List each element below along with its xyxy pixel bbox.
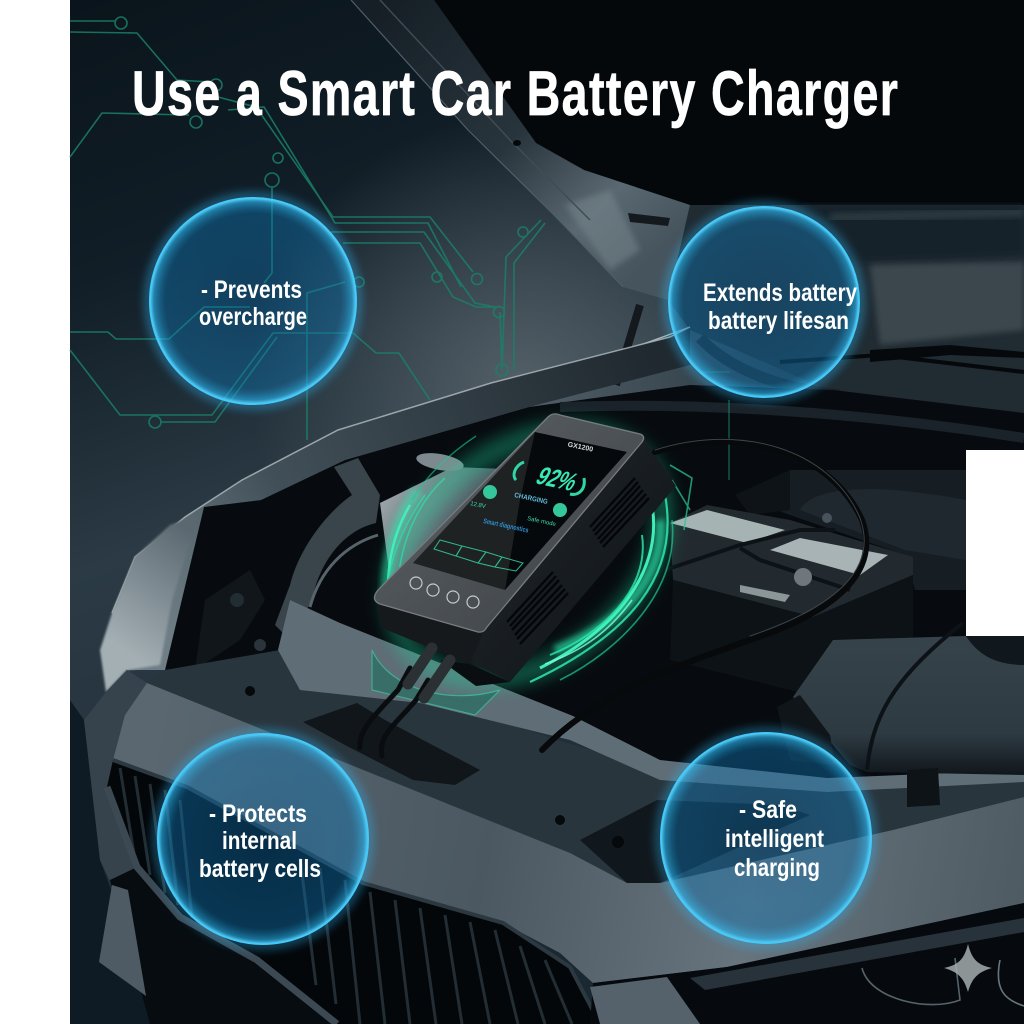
bubble: protects internal battery cells xyxy=(157,733,369,945)
lower bumper piece xyxy=(590,977,700,1024)
charger side body with vents xyxy=(376,437,676,686)
bubble text: charging xyxy=(734,854,820,882)
smart charger device xyxy=(374,414,676,686)
white blank block xyxy=(966,450,1024,636)
bubble text: intelligent xyxy=(725,825,825,853)
engine hoses xyxy=(735,470,966,590)
display: model label: GX1200 xyxy=(567,441,594,454)
energy swirl around charger xyxy=(345,372,730,730)
engine cover behind the charger xyxy=(380,467,530,625)
display: waveform: Smart diagnostics xyxy=(483,518,529,535)
open hood underside xyxy=(351,0,690,300)
bubble: prevents overcharge xyxy=(149,197,357,405)
coolant reservoir xyxy=(777,623,1024,807)
left output plug xyxy=(360,668,410,748)
cowl rubber seal xyxy=(560,406,1024,438)
bubble text: Extends battery xyxy=(703,279,857,307)
display: readings: 12.8V xyxy=(470,501,486,510)
inner fender well xyxy=(195,458,380,670)
radiator support panel xyxy=(147,650,1024,883)
engine bay xyxy=(165,385,1024,800)
bubble text: overcharge xyxy=(199,303,307,331)
cable to battery and front xyxy=(542,441,866,750)
bubble text xyxy=(725,796,825,882)
icon: sparkle watermark xyxy=(944,944,992,992)
dark lower-left front xyxy=(70,700,337,1024)
headlamp bump highlight xyxy=(100,515,198,692)
title: Use a Smart Car Battery Charger xyxy=(132,58,898,129)
bubble text: - Prevents xyxy=(201,276,302,304)
display: indicator dots xyxy=(483,485,567,517)
front bumper side xyxy=(84,670,337,1024)
bubble: safe intelligent charging xyxy=(660,732,872,944)
headlight xyxy=(590,903,1024,1024)
bubble: extends battery lifespan xyxy=(668,206,860,398)
bubble text: battery lifesan xyxy=(708,307,849,335)
bubble text xyxy=(199,800,321,883)
lip highlight under charger xyxy=(278,600,1024,792)
bubble text xyxy=(199,276,307,331)
right output plug xyxy=(381,680,428,756)
display: gauge arcs xyxy=(514,462,584,494)
display: readings right: Safe mode xyxy=(527,516,557,528)
fender arc xyxy=(112,327,690,670)
plug boots xyxy=(408,648,450,698)
bubble text: internal xyxy=(222,827,297,855)
charger display xyxy=(413,432,627,590)
recess near right bubble xyxy=(580,800,810,883)
car battery xyxy=(665,505,913,695)
charger cables xyxy=(360,439,866,756)
display: status text: CHARGING xyxy=(514,492,549,506)
bubble text: battery cells xyxy=(199,855,321,883)
circuit traces xyxy=(70,17,545,440)
charger touch buttons xyxy=(410,577,479,608)
oil cap xyxy=(415,450,465,474)
hood slam panel xyxy=(113,683,1024,983)
mounting holes xyxy=(245,686,624,848)
windshield and wiper xyxy=(600,205,1024,415)
display: mode buttons xyxy=(434,540,523,571)
hood strut xyxy=(616,305,640,385)
bubble text xyxy=(703,279,857,335)
bubble text: - Protects xyxy=(209,800,307,828)
grille xyxy=(107,760,600,1024)
charger front face xyxy=(374,414,644,632)
bubble text: - Safe xyxy=(739,796,797,824)
cable port recess xyxy=(303,703,480,785)
display: charge percentage: 92% xyxy=(531,462,583,496)
